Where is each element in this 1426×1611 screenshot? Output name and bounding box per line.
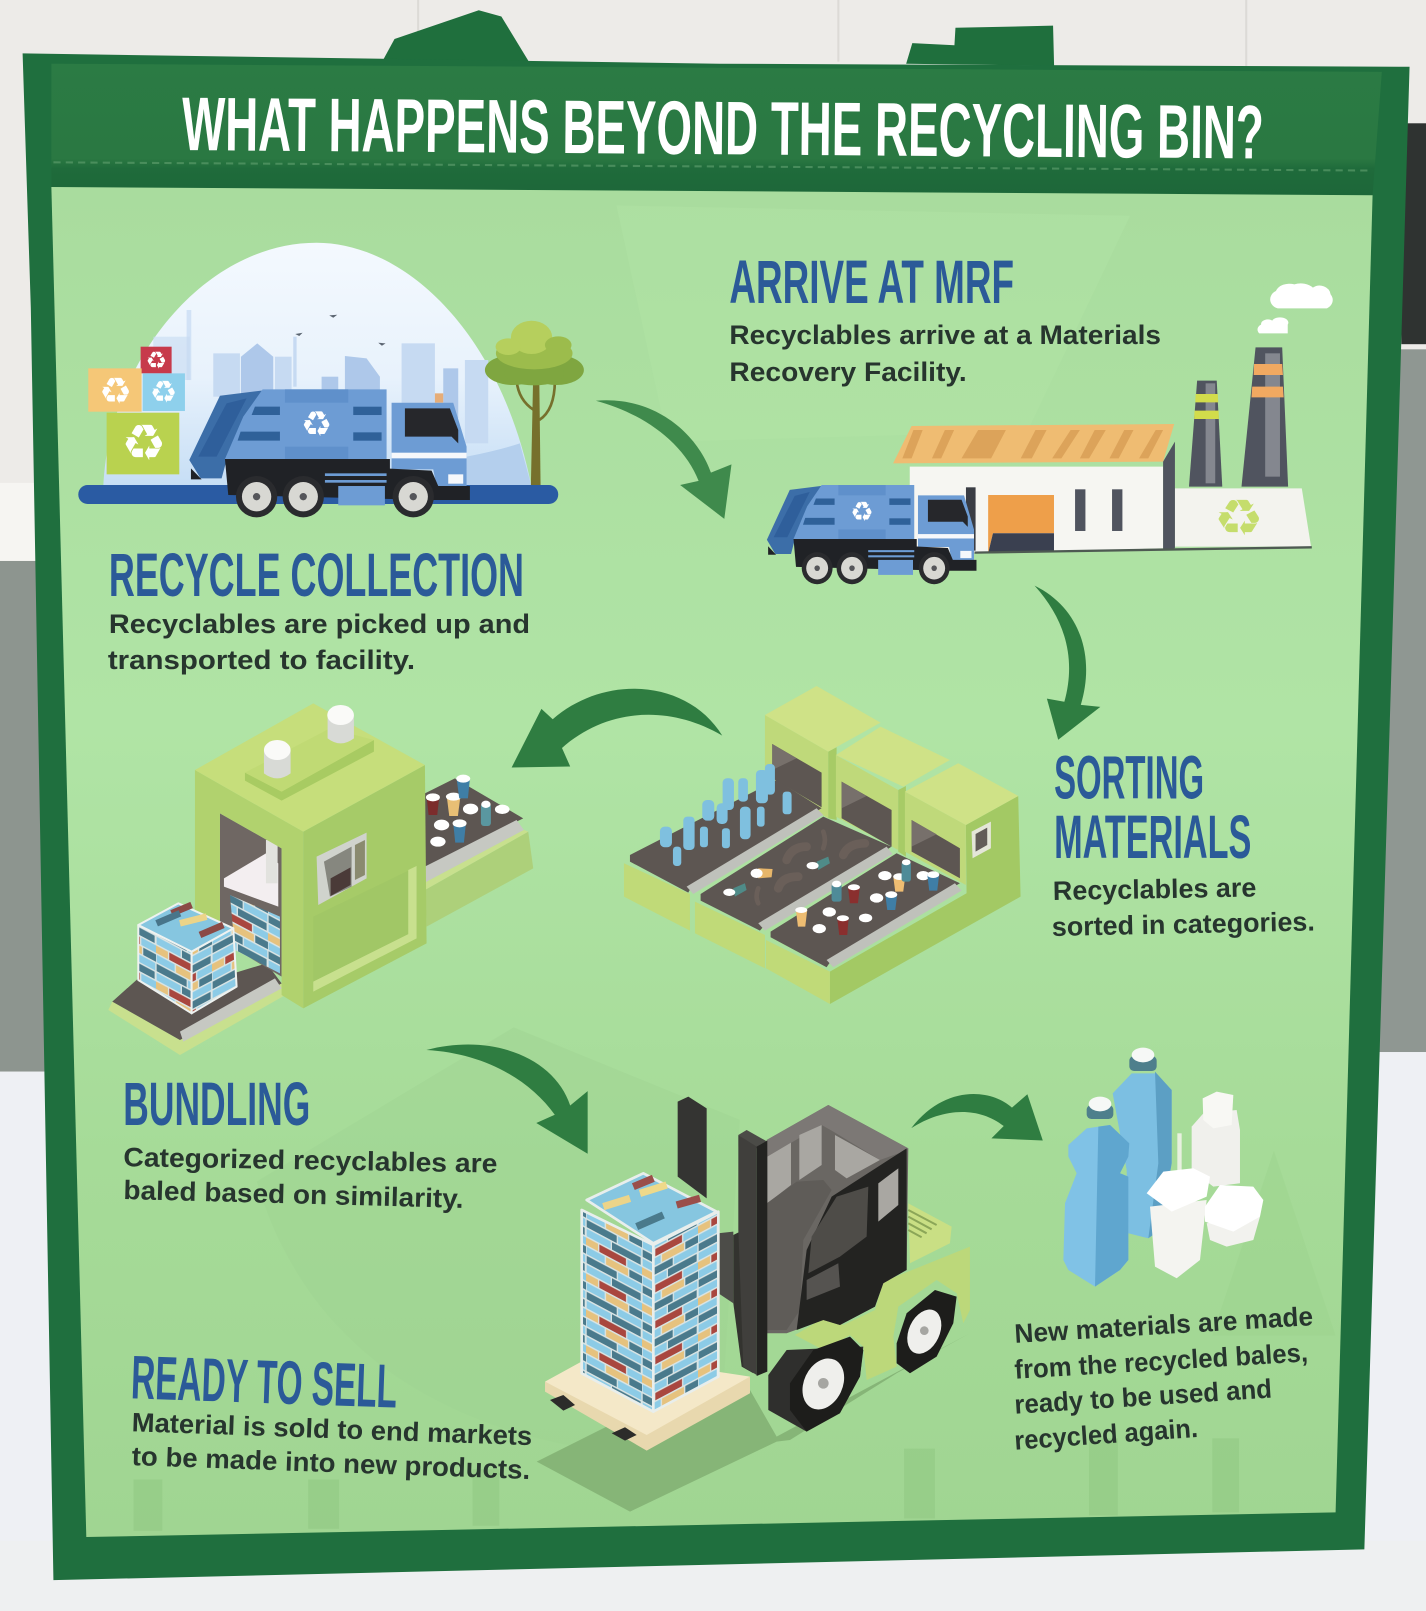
text: arrive at MRF description (729, 320, 1161, 387)
front bottle (1063, 1097, 1129, 1287)
heading: sorting materials (1054, 743, 1251, 872)
machine opening (220, 813, 282, 977)
illustration: forklift with bale stack (537, 1097, 970, 1512)
text: arrive at MRF description: Recovery Facility. (729, 357, 967, 387)
bale stack (582, 1173, 718, 1412)
output conveyor (108, 963, 288, 1055)
pallet (545, 1353, 750, 1451)
illustration: new bottles and containers (1063, 1048, 1263, 1287)
text: new materials description: recycled again. (1013, 1413, 1199, 1456)
city skyline (153, 310, 532, 487)
sorted bottles (660, 764, 792, 866)
arrow: collection to MRF (596, 400, 731, 519)
plant base (1175, 488, 1311, 547)
clouds (1258, 283, 1333, 333)
building (910, 467, 1163, 553)
text: new materials description: New materials are made (1014, 1301, 1314, 1349)
input conveyor (425, 775, 533, 927)
birds (295, 315, 386, 346)
wheels (768, 1290, 957, 1432)
text: ready to sell description: Material is sold to end markets (131, 1407, 533, 1451)
cab (767, 1105, 908, 1333)
heading: sorting materials: MATERIALS (1054, 803, 1251, 872)
press head (224, 853, 278, 907)
illustration: materials recovery facility: ♻ (1214, 490, 1264, 547)
text: bundling description (123, 1142, 498, 1214)
arrow: sorting to bundling (512, 689, 722, 767)
front mast (718, 1130, 767, 1376)
text: new materials description: ready to be used and (1014, 1374, 1273, 1420)
recycling cubes: ♻ (99, 369, 132, 412)
heading: ready to sell: READY TO SELL (130, 1343, 398, 1422)
housing 3 (905, 763, 1018, 885)
recycling cubes (88, 346, 185, 474)
lime rear deck (908, 1203, 952, 1263)
machine left face (195, 770, 303, 1008)
text: sorting description: Recyclables are (1053, 872, 1257, 906)
illustration: recycle collection truck scene (78, 243, 584, 517)
control panel (972, 822, 991, 858)
ground shadow (537, 1333, 970, 1512)
text: arrive at MRF description: Recyclables arrive at a Materials (729, 320, 1161, 350)
straw (1177, 1133, 1182, 1183)
text: ready to sell description (131, 1407, 533, 1485)
illustration: sorting conveyors (624, 686, 1021, 1004)
bale in machine (230, 895, 280, 973)
small truck (767, 485, 976, 584)
heading: bundling: BUNDLING (123, 1070, 310, 1139)
orange roof (893, 424, 1174, 463)
ground line (974, 547, 1312, 553)
heading: arrive at MRF: ARRIVE AT MRF (729, 248, 1014, 317)
green printed panel (51, 187, 1373, 1537)
arrow: MRF to sorting (1035, 586, 1100, 740)
input items (426, 775, 510, 847)
text: new materials description: from the recycled bales, (1014, 1337, 1309, 1385)
illustration: materials recovery facility (893, 283, 1333, 553)
arrow: forklift to new materials (911, 1094, 1043, 1140)
recycling cubes: ♻ (146, 346, 167, 374)
machine right face (303, 765, 427, 1008)
lower bases (624, 863, 830, 1004)
machine top (195, 703, 425, 832)
heading: sorting materials: SORTING (1054, 743, 1204, 812)
housing 2 (836, 727, 950, 857)
back bottle (1113, 1048, 1172, 1238)
recycling cubes: ♻ (150, 376, 177, 411)
text: bundling description: Categorized recyclables are (123, 1142, 498, 1179)
bag handles (382, 10, 1054, 66)
text: new materials description (1013, 1301, 1314, 1456)
text: recycle collection description (108, 609, 530, 675)
housing 1 (765, 686, 881, 820)
road (78, 485, 558, 504)
white cup (1147, 1168, 1210, 1278)
lime chassis (795, 1247, 970, 1380)
text: sorting description: sorted in categories. (1052, 906, 1315, 942)
text: recycle collection description: Recyclables are picked up and (109, 609, 530, 639)
recycling cubes: ♻ (122, 414, 166, 472)
bale cube (138, 903, 237, 1013)
tree (485, 321, 584, 485)
text: recycle collection description: transported to facility. (108, 645, 415, 675)
windows (1075, 489, 1085, 531)
chimneys (1189, 347, 1288, 487)
control panel (317, 833, 367, 905)
sorted cans (723, 832, 865, 903)
heading: recycle collection: RECYCLE COLLECTION (109, 541, 524, 610)
roller door (988, 495, 1054, 553)
text: bundling description: baled based on similarity. (123, 1175, 464, 1214)
garbage truck (189, 389, 470, 517)
conveyor belts (630, 780, 960, 967)
text: sorting description (1052, 872, 1315, 942)
tall white container (1192, 1092, 1240, 1187)
arrow: bundling to ready to sell (426, 1045, 588, 1154)
white box (1205, 1185, 1263, 1247)
illustration: baling machine (108, 703, 533, 1055)
rear mast (678, 1097, 707, 1198)
text: ready to sell description: to be made into new products. (131, 1441, 531, 1485)
header band (51, 64, 1382, 195)
dome sky (103, 243, 532, 487)
cylinders (264, 705, 354, 778)
sorted cups and lids (795, 859, 939, 935)
right side of machine (830, 796, 1021, 1004)
